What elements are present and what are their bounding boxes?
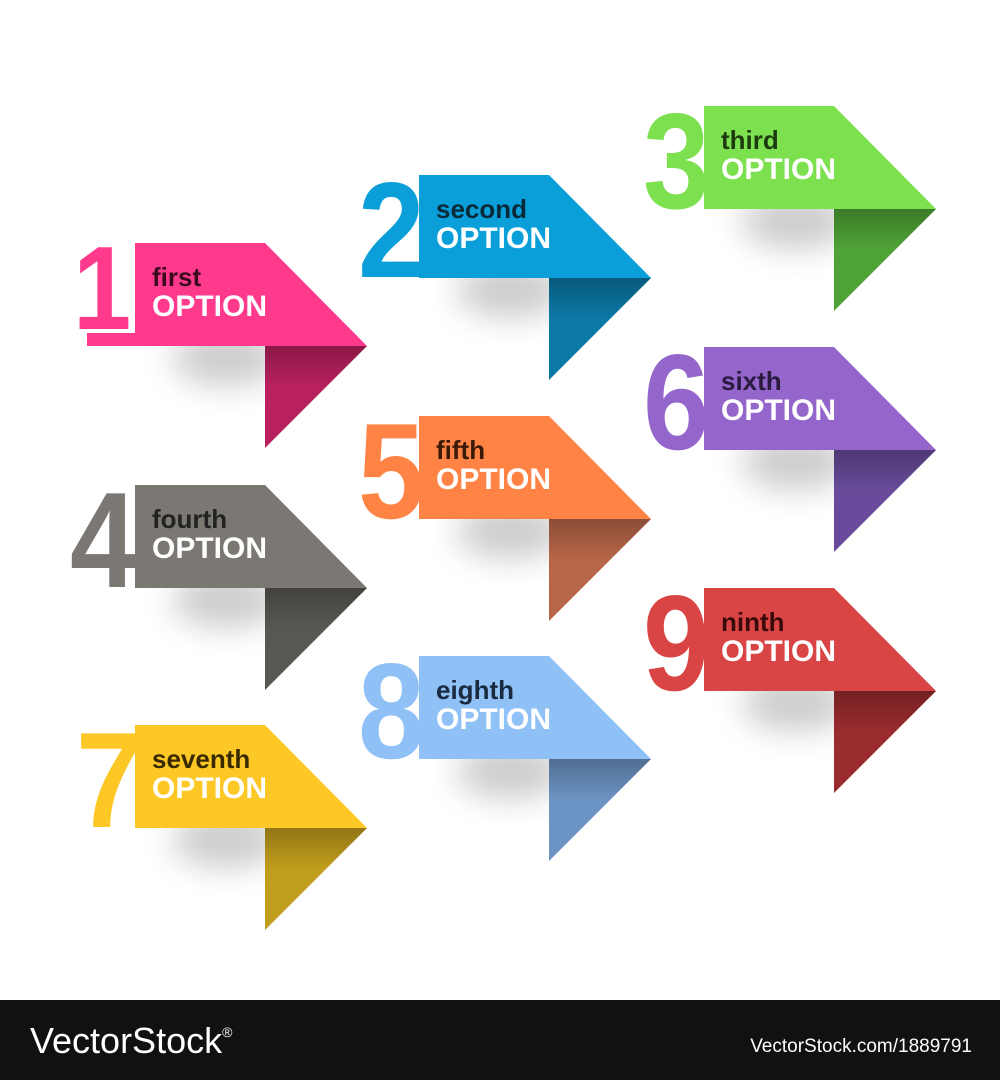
option 4: fourth xyxy=(152,504,227,534)
option 3 xyxy=(643,86,936,311)
option 7 xyxy=(76,705,367,930)
option 1: 1 xyxy=(73,222,131,354)
option 7: seventh xyxy=(152,744,250,774)
option 6: sixth xyxy=(721,366,782,396)
option 6: OPTION xyxy=(721,394,836,427)
option 9 xyxy=(643,568,936,793)
footer bar: VectorStock xyxy=(30,1020,222,1061)
option 5: fifth xyxy=(436,435,485,465)
option 1 xyxy=(73,222,367,448)
option 8: 8 xyxy=(358,636,425,788)
footer bar: ® xyxy=(222,1024,233,1040)
option 8: eighth xyxy=(436,675,514,705)
option 6 xyxy=(643,327,936,552)
option 9: 9 xyxy=(643,568,710,720)
option 7: OPTION xyxy=(152,772,267,805)
option 3: third xyxy=(721,125,779,155)
option 9: OPTION xyxy=(721,635,836,668)
option 4 xyxy=(70,465,367,690)
option 5: 5 xyxy=(358,396,425,548)
option 4: OPTION xyxy=(152,532,267,565)
option 5 xyxy=(358,396,651,621)
option 4: 4 xyxy=(70,465,137,617)
footer bar: VectorStock.com/1889791 xyxy=(750,1036,972,1057)
option 9: ninth xyxy=(721,607,785,637)
option 2 xyxy=(358,155,651,380)
option 8 xyxy=(358,636,651,861)
option 1: first xyxy=(152,262,201,292)
option 1: OPTION xyxy=(152,290,267,323)
option 6: 6 xyxy=(643,327,710,479)
option 3: 3 xyxy=(643,86,710,238)
option 2: OPTION xyxy=(436,222,551,255)
option 7: 7 xyxy=(76,705,143,857)
option 8: OPTION xyxy=(436,703,551,736)
option 2: 2 xyxy=(358,155,425,307)
option 2: second xyxy=(436,194,527,224)
footer bar xyxy=(0,1000,1000,1080)
option 3: OPTION xyxy=(721,153,836,186)
option 5: OPTION xyxy=(436,463,551,496)
